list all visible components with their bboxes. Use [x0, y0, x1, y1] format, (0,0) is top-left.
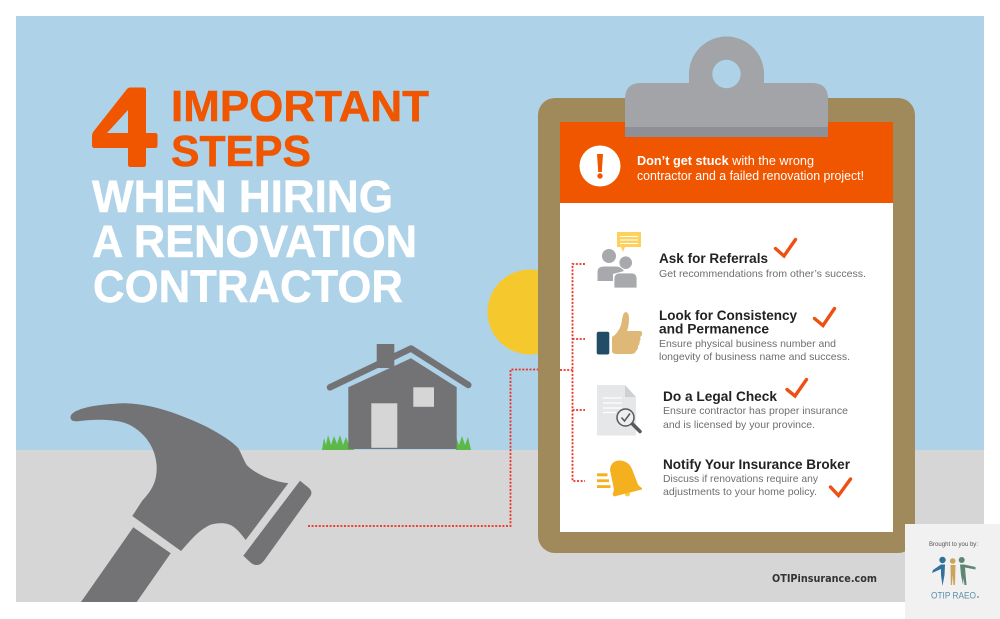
- check mark 4: [830, 479, 850, 496]
- clip body: [625, 36, 828, 137]
- house illustration: [322, 344, 471, 450]
- warning icon: [580, 146, 620, 186]
- house body: [348, 358, 457, 449]
- sun: [488, 270, 572, 354]
- heading: important steps: IMPORTANT: [171, 83, 429, 131]
- step 3 heading: Do a Legal Check: [663, 389, 777, 404]
- registered mark: [977, 596, 979, 598]
- hammer claw cap: [243, 481, 311, 565]
- sponsor badge: [905, 524, 1000, 619]
- step 4 description: Discuss if renovations require any: [663, 473, 819, 485]
- clip: [625, 36, 828, 137]
- step 4 heading: Notify Your Insurance Broker: [663, 457, 851, 472]
- icon: bell: [597, 460, 642, 496]
- numeral 4: [92, 88, 158, 167]
- check mark 3: [787, 380, 806, 396]
- dotted timeline for checklist: [560, 264, 585, 481]
- website url: OTIPinsurance.com: [772, 572, 877, 585]
- heading: when hiring a renovation contractor: WHEN HIRING: [92, 171, 393, 222]
- logo: three figures: [932, 557, 976, 586]
- step 2 heading: and Permanence: [659, 322, 770, 336]
- title: STEPS: [171, 128, 311, 176]
- hammer handle: [81, 527, 171, 602]
- icon: people with speech bubble: [598, 232, 641, 288]
- step 2 description: Ensure physical business number and: [659, 338, 836, 350]
- step 3: legal check: [597, 380, 848, 436]
- chimney: [377, 344, 394, 368]
- step 3 description: Ensure contractor has proper insurance: [663, 405, 848, 417]
- step 2 description: [659, 338, 850, 363]
- step 3 description: [663, 405, 848, 431]
- icon: thumbs up: [597, 312, 642, 354]
- icon: document with magnifier: [597, 385, 640, 436]
- header banner: [560, 122, 893, 203]
- check mark 1: [776, 240, 796, 256]
- logo wordmark: OTIP RAEO: [931, 590, 976, 602]
- step 1 description: Get recommendations from other’s success.: [659, 268, 866, 280]
- paper: [560, 122, 893, 532]
- dotted connector from hammer to checklist: [308, 370, 540, 526]
- roof: [330, 348, 468, 387]
- check mark 2: [814, 308, 834, 326]
- title: [92, 83, 429, 312]
- step 2 description: longevity of business name and success.: [659, 351, 850, 363]
- step 4 description: [663, 473, 819, 498]
- grass: [322, 435, 471, 450]
- title: CONTRACTOR: [93, 261, 403, 312]
- door: [371, 403, 397, 448]
- step 3 description: and is licensed by your province.: [663, 419, 815, 431]
- brought to you by text: Brought to you by:: [929, 541, 978, 548]
- clip hole: [712, 60, 741, 88]
- background ground: [16, 450, 984, 602]
- clipboard: [538, 36, 915, 553]
- step 2 heading: Look for Consistency: [659, 308, 797, 323]
- background sky: [16, 16, 984, 450]
- step 1: ask for referrals: [598, 232, 866, 288]
- banner text: contractor and a failed renovation project!: [637, 168, 864, 183]
- step 1 heading: Ask for Referrals: [659, 251, 768, 266]
- banner text: Don’t get stuck with the wrong: [637, 153, 814, 168]
- hammer illustration: [71, 403, 311, 602]
- step 4 description: adjustments to your home policy.: [663, 486, 817, 498]
- banner text: [637, 153, 864, 183]
- title: A RENOVATION: [92, 216, 417, 267]
- clip shadow: [625, 127, 828, 137]
- clipboard board: [538, 98, 915, 553]
- step 2: consistency and permanence: [597, 308, 850, 363]
- badge background: [905, 524, 1000, 619]
- step 4: insurance broker: [597, 457, 851, 498]
- window: [413, 387, 434, 407]
- hammer head: [71, 403, 288, 551]
- step 2 heading: [659, 308, 797, 336]
